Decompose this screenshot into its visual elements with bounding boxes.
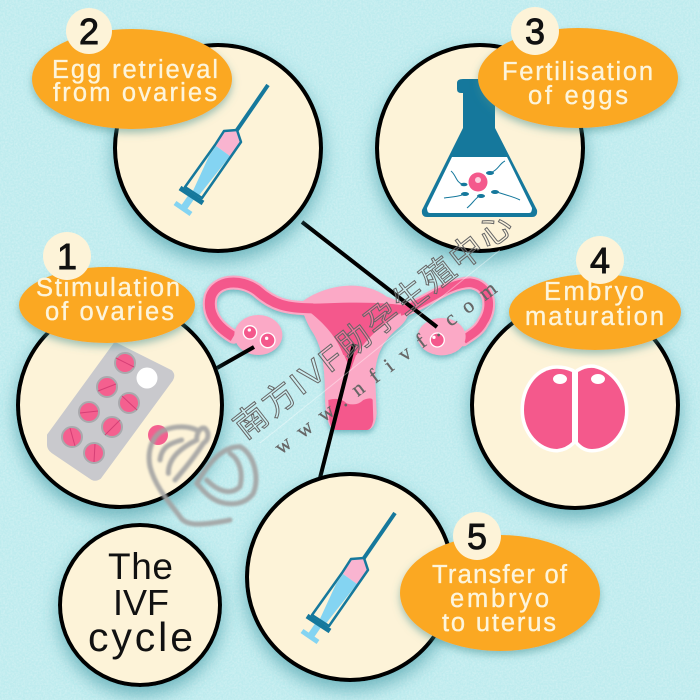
callout: step 3 — [478, 7, 678, 128]
callout: step 2: 2 — [79, 11, 99, 52]
panel: step 2 circle — [115, 45, 321, 251]
callout: step 1: of ovaries — [45, 298, 174, 326]
title — [88, 546, 193, 660]
panel: step 5 circle — [247, 474, 453, 680]
connector lines — [217, 222, 437, 478]
title: IVF — [113, 582, 169, 623]
sperm — [444, 161, 520, 208]
egg — [468, 172, 488, 192]
left ovary — [234, 315, 282, 355]
callout: step 5: Transfer of — [432, 561, 568, 589]
uterus body — [300, 286, 408, 430]
callout: step 5: 5 — [467, 516, 487, 557]
icon: syringe embryo transfer — [302, 513, 395, 642]
callout: step 1 — [19, 232, 195, 343]
panel: step 4 circle — [472, 302, 678, 508]
callout: step 4: 4 — [590, 240, 610, 281]
callout: step 5: embryo — [450, 585, 549, 613]
callout: step 4: maturation — [525, 303, 664, 331]
panel: step 1 circle — [18, 303, 222, 507]
callout: step 3: Fertilisation — [502, 58, 653, 86]
left tube inner — [210, 282, 313, 337]
watermark text: 南方IVF助孕生殖中心 — [227, 206, 519, 446]
title: The — [108, 546, 173, 587]
callout: step 4 — [509, 236, 681, 350]
uterine cavity — [300, 303, 413, 355]
panel: title circle — [60, 525, 220, 685]
callout: step 2: Egg retrieval — [52, 56, 218, 84]
callout: step 3: of eggs — [528, 82, 628, 110]
loose pill — [148, 425, 168, 445]
left fallopian tube — [210, 282, 313, 337]
callout: step 4: Embryo — [544, 278, 644, 306]
icon: syringe egg retrieval — [175, 85, 268, 214]
icon: flask with sperm and egg — [422, 79, 537, 217]
callout: step 5: to uterus — [442, 609, 556, 637]
cervix — [328, 398, 373, 430]
icon: two-cell embryo — [524, 368, 625, 449]
callout: step 1: 1 — [57, 236, 77, 277]
illustration: uterus and ovaries — [210, 282, 489, 430]
watermark text: www.nfivf.com — [270, 276, 501, 459]
callout: step 3: 3 — [525, 11, 545, 52]
right tube inner — [400, 283, 489, 340]
title: cycle — [88, 614, 193, 660]
watermark logo — [149, 427, 256, 524]
callout: step 1: Stimulation — [36, 274, 180, 302]
right ovary — [418, 318, 466, 355]
panel: step 3 circle — [377, 45, 583, 251]
right fallopian tube — [400, 283, 489, 340]
callout: step 5 — [400, 512, 600, 651]
callout: step 2 — [32, 8, 232, 129]
icon: blister pack of pills — [48, 343, 173, 480]
callout: step 2: from ovaries — [53, 79, 217, 107]
pills — [62, 353, 158, 463]
